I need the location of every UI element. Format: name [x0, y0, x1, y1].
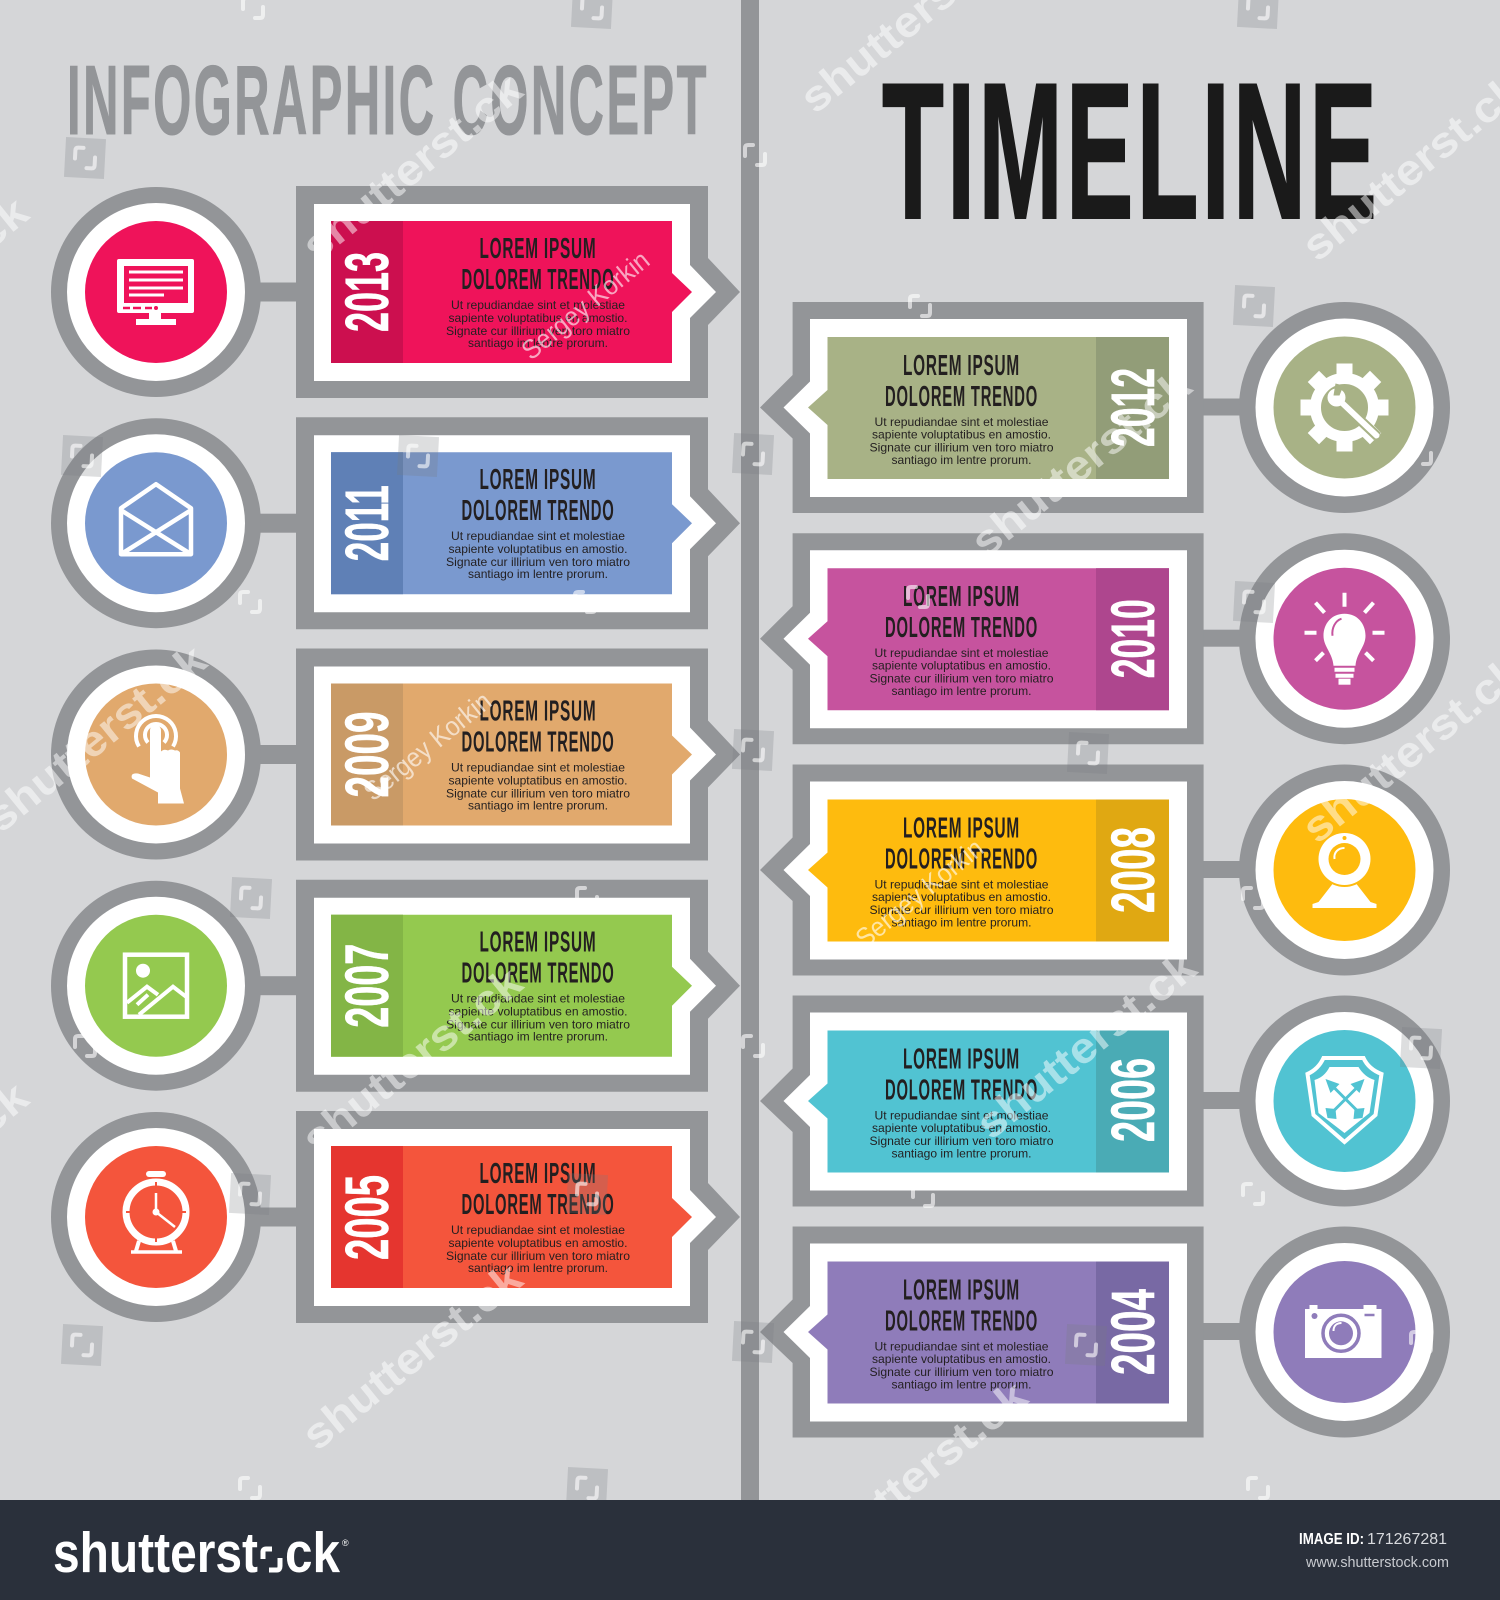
timeline entry: 2007: DOLOREM TRENDO [462, 958, 614, 990]
timeline entry: 2008: DOLOREM TRENDO [885, 844, 1038, 876]
timeline entry: 2004 [760, 1226, 1450, 1438]
timeline entry: 2009: santiago im lentre prorum. [468, 798, 608, 812]
watermark: shutterstock text: shutterst.ck [967, 943, 1206, 1149]
timeline entry: 2005: Ut repudiandae sint et molestiae [451, 1223, 625, 1237]
watermark: shutterstock text: Sergey Korkin [516, 245, 655, 366]
timeline entry: 2011: DOLOREM TRENDO [462, 495, 614, 527]
text: INFOGRAPHIC CONCEPT [67, 45, 709, 155]
footer image id: IMAGE ID: [1299, 1531, 1364, 1548]
timeline entry: 2011: LOREM IPSUM [480, 464, 596, 496]
timeline entry: 2010: Ut repudiandae sint et molestiae [874, 646, 1049, 660]
timeline entry: 2011: Ut repudiandae sint et molestiae [451, 529, 625, 543]
timeline entry: 2007: sapiente voluptatibus en amostio. [448, 1005, 628, 1019]
timeline entry: 2011 [51, 417, 740, 629]
timeline entry: 2008: sapiente voluptatibus en amostio. [872, 890, 1051, 904]
timeline entry: 2011: 2011 [333, 485, 401, 561]
timeline entry: 2011: santiago im lentre prorum. [468, 567, 608, 581]
timeline entry: 2013: Signate cur illirium ven toro miatro [446, 324, 630, 338]
timeline entry: 2006: Signate cur illirium ven toro miatro [870, 1134, 1054, 1148]
timeline entry: 2007 [51, 880, 740, 1092]
timeline entry: 2008: LOREM IPSUM [903, 812, 1020, 844]
timeline entry: 2007: 2007 [333, 944, 401, 1028]
watermark: shutterstock text: Sergey Korkin [850, 833, 989, 954]
timeline entry: 2007: LOREM IPSUM [480, 927, 596, 959]
timeline entry: 2009: Ut repudiandae sint et molestiae [451, 760, 625, 774]
footer logo: ® [342, 1538, 349, 1548]
timeline entry: 2004: 2004 [1099, 1289, 1167, 1375]
central timeline axis [741, 0, 759, 1500]
timeline entry: 2009: DOLOREM TRENDO [462, 726, 614, 758]
timeline entry: 2012: Signate cur illirium ven toro miatro [870, 440, 1054, 454]
timeline entry: 2013: LOREM IPSUM [480, 233, 596, 265]
timeline entry: 2005: LOREM IPSUM [480, 1158, 596, 1190]
timeline entry: 2012 [760, 302, 1450, 513]
watermark: shutterstock text: shutterst.ck [293, 1254, 532, 1460]
timeline entry: 2004: LOREM IPSUM [903, 1274, 1020, 1306]
timeline entry: 2008: Ut repudiandae sint et molestiae [874, 878, 1049, 892]
timeline entry: 2004: DOLOREM TRENDO [885, 1306, 1038, 1338]
timeline entry: 2006: DOLOREM TRENDO [885, 1074, 1038, 1106]
timeline entry: 2007: santiago im lentre prorum. [468, 1030, 608, 1044]
timeline entry: 2012: Ut repudiandae sint et molestiae [874, 415, 1049, 429]
timeline entry: 2012: LOREM IPSUM [903, 350, 1020, 382]
timeline entry: 2005 [51, 1111, 740, 1323]
timeline entry: 2006: sapiente voluptatibus en amostio. [872, 1121, 1051, 1135]
timeline entry: 2008: 2008 [1099, 827, 1167, 913]
timeline entry: 2012: sapiente voluptatibus en amostio. [872, 428, 1051, 442]
timeline entry: 2004: Signate cur illirium ven toro miatro [870, 1365, 1054, 1379]
timeline entry: 2006: Ut repudiandae sint et molestiae [874, 1108, 1049, 1122]
timeline entry: 2010: sapiente voluptatibus en amostio. [872, 659, 1051, 673]
timeline entry: 2009 [51, 648, 740, 860]
timeline entry: 2011: Signate cur illirium ven toro miatro [446, 555, 630, 569]
timeline entry: 2007: Ut repudiandae sint et molestiae [451, 992, 625, 1006]
timeline entry: 2005: sapiente voluptatibus en amostio. [448, 1236, 628, 1250]
timeline entry: 2013: Ut repudiandae sint et molestiae [451, 298, 625, 312]
timeline entry: 2011: sapiente voluptatibus en amostio. [448, 542, 628, 556]
timeline entry: 2009: Signate cur illirium ven toro miatro [446, 786, 630, 800]
timeline entry: 2010: LOREM IPSUM [903, 581, 1020, 613]
timeline entry: 2005: santiago im lentre prorum. [468, 1261, 608, 1275]
timeline entry: 2004: sapiente voluptatibus en amostio. [872, 1352, 1051, 1366]
timeline entry: 2009: sapiente voluptatibus en amostio. [448, 774, 628, 788]
timeline entry: 2008 [760, 764, 1450, 976]
timeline entry: 2010 [760, 533, 1450, 744]
timeline entry: 2012: santiago im lentre prorum. [892, 453, 1032, 467]
footer url: www.shutterstock.com [1305, 1554, 1449, 1571]
timeline entry: 2010: DOLOREM TRENDO [885, 612, 1038, 644]
timeline entry: 2005: DOLOREM TRENDO [462, 1189, 614, 1221]
timeline entry: 2004: santiago im lentre prorum. [892, 1378, 1032, 1392]
timeline entry: 2013: sapiente voluptatibus en amostio. [448, 311, 628, 325]
watermark: shutterstock text: shutterst.ck [293, 958, 532, 1164]
timeline entry: 2006 [760, 996, 1450, 1206]
timeline entry: 2010: Signate cur illirium ven toro miatro [870, 672, 1054, 686]
timeline entry: 2010: 2010 [1099, 599, 1167, 678]
timeline entry: 2006: LOREM IPSUM [903, 1044, 1020, 1076]
timeline entry: 2009: 2009 [333, 712, 401, 798]
timeline entry: 2006: santiago im lentre prorum. [892, 1146, 1032, 1160]
timeline entry: 2005: 2005 [333, 1175, 401, 1260]
watermark: shutterstock text: shutterst.ck [293, 65, 532, 271]
timeline entry: 2013: santiago im lentre prorum. [468, 336, 608, 350]
timeline entry: 2006: 2006 [1099, 1058, 1167, 1142]
timeline entry: 2013 [51, 186, 740, 398]
timeline entry: 2013: 2013 [333, 252, 401, 332]
timeline entry: 2004: Ut repudiandae sint et molestiae [874, 1340, 1049, 1354]
timeline entry: 2005: Signate cur illirium ven toro miatro [446, 1249, 630, 1263]
footer logo: shutterst [53, 1521, 258, 1585]
watermark: shutterstock text: shutterst.ck [798, 1372, 1037, 1578]
timeline entry: 2010: santiago im lentre prorum. [892, 684, 1032, 698]
timeline entry: 2007: Signate cur illirium ven toro miatro [446, 1018, 630, 1032]
timeline entry: 2012: DOLOREM TRENDO [885, 381, 1038, 413]
footer bar [0, 1500, 1500, 1600]
footer logo: ck [285, 1521, 340, 1585]
footer id number: 171267281 [1367, 1531, 1447, 1548]
timeline entry: 2012: 2012 [1099, 368, 1167, 447]
timeline entry: 2009: LOREM IPSUM [480, 696, 596, 728]
timeline entry: 2013: DOLOREM TRENDO [462, 264, 614, 296]
watermark: shutterstock text: shutterst.ck [962, 361, 1201, 567]
watermark: shutterstock text: Sergey Korkin [358, 686, 497, 807]
timeline entry: 2008: Signate cur illirium ven toro miatro [870, 903, 1054, 917]
timeline entry: 2008: santiago im lentre prorum. [892, 916, 1032, 930]
